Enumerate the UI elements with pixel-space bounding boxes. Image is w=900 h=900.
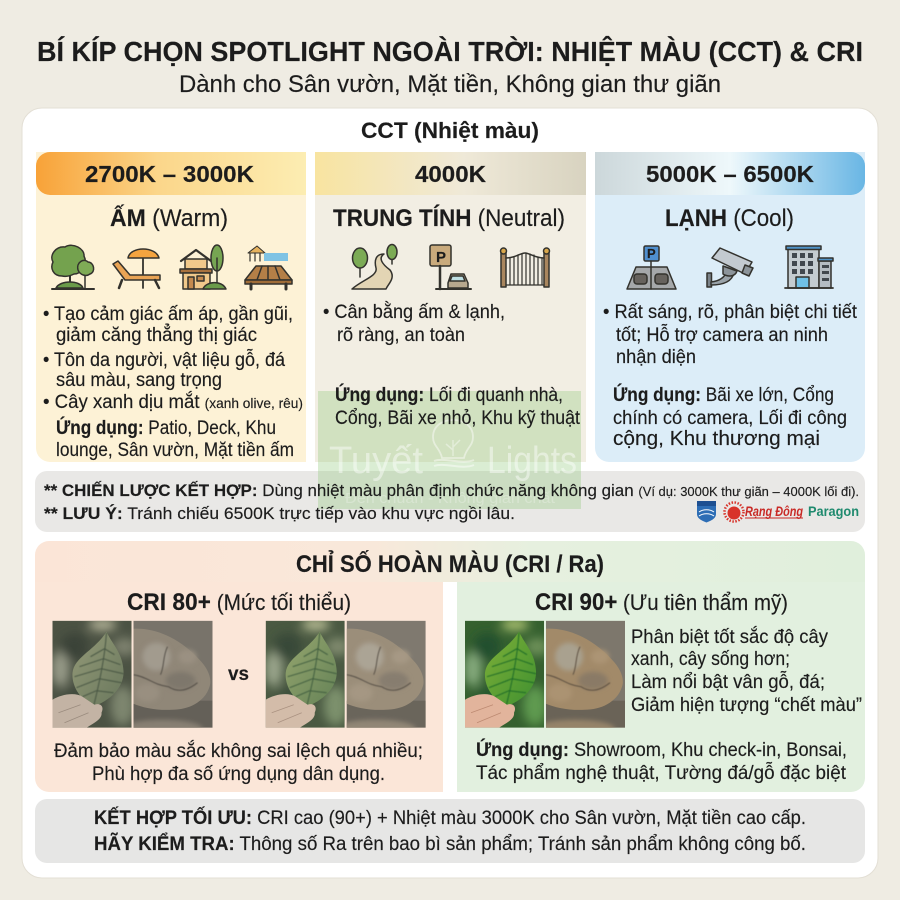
subtitle: Dành cho Sân vườn, Mặt tiền, Không gian thư giãn <box>179 71 721 98</box>
CRI 90 benefits <box>631 626 862 716</box>
warm bullets: • Tôn da người, vật liệu gỗ, đá <box>43 349 285 371</box>
warm bullets <box>43 304 303 413</box>
logo: Rạng Đông <box>724 502 803 522</box>
watermark: Tuyết Lights <box>318 391 581 509</box>
cool heading: LẠNH (Cool) <box>665 205 794 232</box>
logo: Rạng Đông: Rạng Đông <box>745 503 803 519</box>
warm bullets: • Tạo cảm giác ấm áp, gần gũi, <box>43 304 293 325</box>
icon: deck by the water <box>245 246 292 289</box>
cool applications: chính có camera, Lối đi công <box>613 408 847 429</box>
cool applications: Ứng dụng: Bãi xe lớn, Cổng <box>613 384 834 406</box>
CRI 90 heading: CRI 90+ (Ưu tiên thẩm mỹ) <box>535 589 788 616</box>
warm bullets: sâu màu, sang trọng <box>56 370 222 391</box>
CRI 90 benefits: Làm nổi bật vân gỗ, đá; <box>631 671 825 693</box>
neutral bullets: rõ ràng, an toàn <box>337 325 465 346</box>
cool header band <box>595 152 865 195</box>
icon: sun lounger and umbrella <box>113 249 160 288</box>
icon: parking sign and car: P <box>436 249 446 266</box>
panel: CRI <box>35 541 865 792</box>
vs label: vs <box>228 664 249 685</box>
panel: CRI 80+ <box>35 582 443 792</box>
watermark: Tuyết Lights: Tuyết <box>329 440 423 482</box>
cool range label: 5000K – 6500K <box>646 161 814 187</box>
cool bullets: • Rất sáng, rõ, phân biệt chi tiết <box>603 302 858 323</box>
warm heading: ẤM (Warm) <box>110 204 228 232</box>
CRI 90 applications: Tác phẩm nghệ thuật, Tường đá/gỗ đặc biệt <box>476 762 847 784</box>
icon: parking sign and car <box>430 245 471 289</box>
watermark: Tuyết Lights: Đèn chuẩn - Không gian chất <box>345 490 556 507</box>
cool bullets: nhận diện <box>616 347 696 368</box>
icon: gate <box>500 248 550 287</box>
CRI 90 applications: Ứng dụng: Showroom, Khu check-in, Bonsai, <box>476 739 847 761</box>
neutral applications: Cổng, Bãi xe nhỏ, Khu kỹ thuật <box>335 408 581 429</box>
photo: vivid leaf and stone <box>464 619 625 738</box>
icon: winding path <box>352 244 397 289</box>
title: BÍ KÍP CHỌN SPOTLIGHT NGOÀI TRỜI: NHIỆT MÀU (CCT) & CRI <box>37 36 863 67</box>
warm header band <box>36 152 306 195</box>
warning line: ** LƯU Ý: Tránh chiếu 6500K trực tiếp vào khu vực ngồi lâu. <box>44 504 515 523</box>
CRI 80 description: Phù hợp đa số ứng dụng dân dụng. <box>92 764 385 785</box>
icon: parking lot <box>627 246 676 289</box>
CRI 80 description <box>54 740 423 785</box>
panel: conclusion <box>35 799 865 863</box>
photo: leaf and stone, CRI 80 <box>52 619 212 738</box>
photo: leaf and stone, comparison <box>265 619 426 738</box>
watermark: Tuyết Lights: Lights <box>487 440 577 482</box>
icon: office building <box>785 246 833 288</box>
neutral header band <box>315 152 586 195</box>
cool bullets <box>603 302 858 368</box>
CCT heading: CCT (Nhiệt màu) <box>361 118 539 143</box>
neutral bullets: • Cân bằng ấm & lạnh, <box>323 301 505 323</box>
warm applications: lounge, Sân vườn, Mặt tiền ấm <box>56 440 294 461</box>
panel: warm <box>36 152 306 462</box>
icon: security camera <box>707 248 753 287</box>
CRI 80 description: Đảm bảo màu sắc không sai lệch quá nhiều; <box>54 740 423 762</box>
neutral range label: 4000K <box>415 161 486 187</box>
CRI 90 benefits: Giảm hiện tượng “chết màu” <box>631 695 862 716</box>
icon: house and tree <box>180 245 226 289</box>
CRI 80 heading: CRI 80+ (Mức tối thiểu) <box>127 589 351 616</box>
panel: strategy note <box>35 391 865 532</box>
warm range label: 2700K – 3000K <box>85 161 254 187</box>
neutral bullets <box>323 301 505 346</box>
warm bullets: • Cây xanh dịu mắt (xanh olive, rêu) <box>43 391 303 413</box>
panel: neutral <box>315 152 586 462</box>
CRI header band <box>35 541 865 582</box>
warm bullets: giảm căng thẳng thị giác <box>56 324 257 346</box>
icon: parking lot: P <box>647 246 656 261</box>
best combination line: KẾT HỢP TỐI ƯU: CRI cao (90+) + Nhiệt màu 3000K cho Sân vườn, Mặt tiền cao cấp. <box>94 807 806 829</box>
cool bullets: tốt; Hỗ trợ camera an ninh <box>616 324 828 346</box>
CRI heading: CHỈ SỐ HOÀN MÀU (CRI / Ra) <box>296 549 604 578</box>
CRI 90 benefits: Phân biệt tốt sắc độ cây <box>631 626 828 648</box>
panel: CRI 90+ <box>457 582 865 792</box>
warm applications <box>56 417 294 461</box>
CRI 90 applications <box>476 739 847 784</box>
neutral applications <box>335 384 581 429</box>
neutral applications: Ứng dụng: Lối đi quanh nhà, <box>335 384 563 406</box>
cool applications <box>613 384 847 450</box>
CRI 90 benefits: xanh, cây sống hơn; <box>631 649 790 670</box>
neutral heading: TRUNG TÍNH (Neutral) <box>333 204 565 232</box>
cool applications: cộng, Khu thương mại <box>613 428 820 450</box>
logo: Philips <box>697 501 716 522</box>
icon: trees <box>52 245 94 289</box>
check line: HÃY KIỂM TRA: Thông số Ra trên bao bì sản phẩm; Tránh sản phẩm không công bố. <box>94 833 806 855</box>
warm applications: Ứng dụng: Patio, Deck, Khu <box>56 417 276 439</box>
logo: Paragon: Paragon <box>808 503 859 519</box>
strategy line: ** CHIẾN LƯỢC KẾT HỢP: Dùng nhiệt màu phân định chức năng không gian (Ví dụ: 3000K thư giãn – 4000K lối đi). <box>44 481 859 500</box>
panel: cool <box>595 152 865 462</box>
